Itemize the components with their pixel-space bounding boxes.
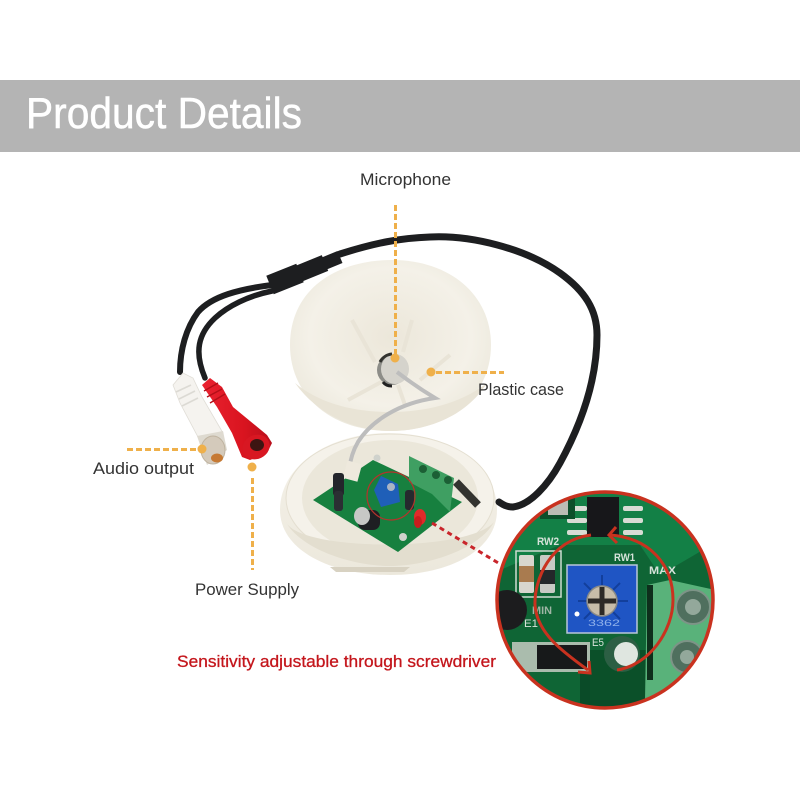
red power plug bbox=[202, 378, 274, 464]
green terminal bbox=[645, 580, 715, 700]
pointer dots bbox=[198, 354, 436, 472]
upper plastic dome bbox=[290, 260, 491, 431]
board labels: E5 bbox=[592, 637, 604, 649]
PCB bbox=[313, 454, 478, 552]
title: Product Details bbox=[26, 89, 302, 138]
capacitors bbox=[333, 473, 344, 496]
board labels: MIN bbox=[532, 605, 552, 617]
label: microphone: Microphone bbox=[360, 170, 451, 189]
potentiometer bbox=[374, 476, 400, 507]
microphone pointer bbox=[394, 205, 397, 355]
white RCA plug bbox=[173, 373, 227, 465]
board labels: MAX bbox=[649, 565, 677, 577]
red LED bbox=[414, 509, 426, 528]
board labels: E1 bbox=[524, 618, 538, 630]
white plug bbox=[343, 460, 362, 482]
chip bbox=[587, 497, 619, 537]
audio output pointer bbox=[127, 448, 202, 451]
blue trimmer bbox=[567, 565, 637, 633]
plastic case pointer bbox=[436, 371, 504, 374]
board labels: RW1 bbox=[614, 552, 635, 564]
grey microphone wire bbox=[349, 372, 435, 470]
lower base bbox=[280, 433, 497, 575]
label: sensitivity note: Sensitivity adjustable through screwdriver bbox=[177, 652, 496, 671]
label: power supply: Power Supply bbox=[195, 580, 299, 599]
board labels: RW2 bbox=[537, 536, 559, 548]
magnified circuit inset bbox=[487, 490, 720, 710]
microphone capsule bbox=[377, 354, 409, 386]
black cable entering bbox=[456, 482, 478, 505]
black cable bbox=[180, 237, 597, 507]
board labels bbox=[524, 536, 677, 649]
connector lines bbox=[127, 205, 504, 570]
header band bbox=[0, 80, 800, 152]
solder pad bbox=[604, 636, 640, 672]
components bbox=[516, 551, 561, 597]
rotation arrows bbox=[535, 527, 673, 673]
cable connector bbox=[270, 257, 340, 285]
label: plastic case: Plastic case bbox=[478, 380, 564, 399]
connector block bbox=[409, 456, 454, 512]
sensitivity pointer bbox=[432, 523, 500, 564]
magnified circuit inset: 3362 bbox=[588, 618, 620, 628]
label: audio output: Audio output bbox=[93, 459, 194, 478]
red ring bbox=[367, 472, 415, 520]
power supply pointer bbox=[251, 478, 254, 570]
